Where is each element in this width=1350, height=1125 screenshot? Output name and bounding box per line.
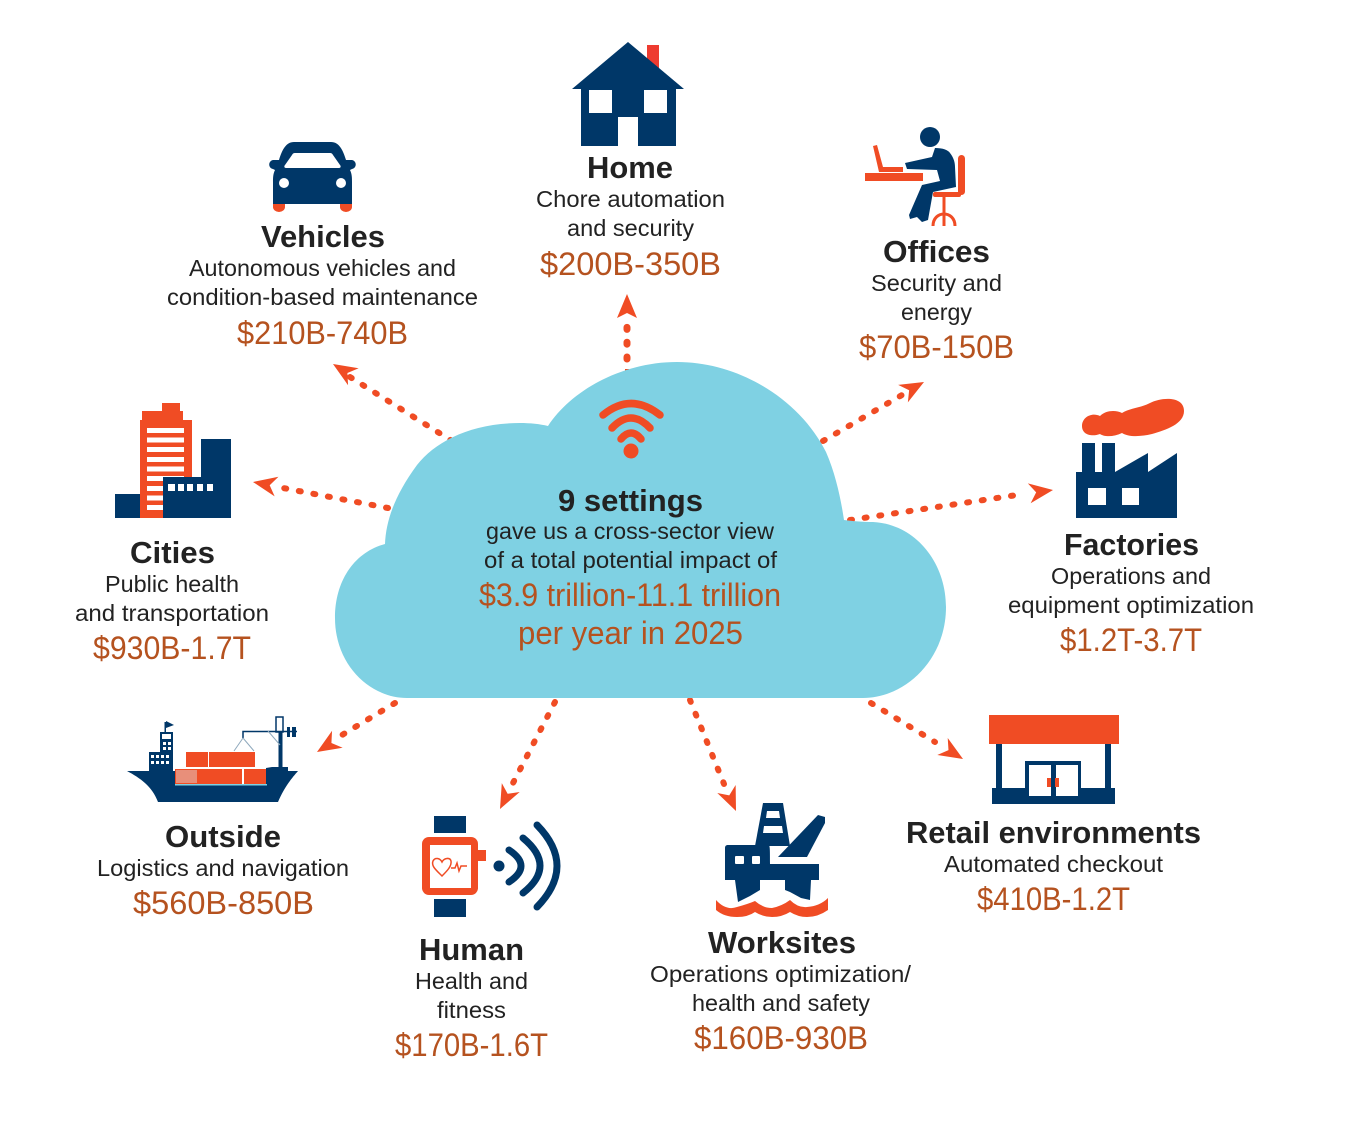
icon: house (572, 42, 684, 146)
icon: smartwatch (422, 816, 557, 917)
cloud heading: 9 settings (558, 483, 703, 518)
value: human: $170B-1.6T (395, 1027, 548, 1063)
description: cities: Public health (105, 571, 239, 597)
panel: vehicles (167, 142, 478, 351)
description: vehicles (167, 255, 478, 310)
value: home: $200B-350B (540, 246, 721, 282)
cloud text: gave us a cross-sector view (486, 518, 775, 544)
value: worksites: $160B-930B (694, 1020, 868, 1056)
description: factories: equipment optimization (1008, 592, 1254, 618)
heading: human: Human (419, 932, 524, 967)
description: human: Health and (415, 968, 528, 994)
panel: cities (75, 403, 269, 666)
panel: outside (97, 717, 349, 921)
panel: offices (859, 127, 1014, 365)
value: outside: $560B-850B (133, 885, 314, 921)
total impact figure: per year in 2025 (518, 615, 743, 651)
value: vehicles: $210B-740B (237, 315, 408, 351)
value: factories: $1.2T-3.7T (1060, 622, 1202, 658)
panel: retail environments (906, 715, 1201, 917)
description: outside: Logistics and navigation (97, 855, 349, 881)
panel: worksites (650, 803, 911, 1056)
arrow: to human (491, 702, 555, 813)
heading: retail environments: Retail environments (906, 815, 1201, 850)
description: cities: and transportation (75, 600, 269, 626)
description: retail environments: Automated checkout (944, 851, 1163, 877)
icon: person at desk (865, 127, 965, 226)
arrow: to cities (251, 472, 388, 508)
heading: factories: Factories (1064, 527, 1199, 562)
total impact figure (479, 577, 781, 651)
description: worksites (650, 961, 911, 1016)
icon: wifi (603, 404, 660, 458)
icon: oil rig (716, 803, 828, 917)
description: factories: Operations and (1051, 563, 1211, 589)
arrow: to vehicles (328, 356, 452, 441)
arrow: to offices (823, 373, 929, 441)
heading: offices: Offices (883, 234, 990, 269)
description: factories (1008, 563, 1254, 618)
description: worksites: health and safety (692, 990, 870, 1016)
icon: car (269, 142, 356, 212)
icon: storefront (989, 715, 1119, 804)
arrow: to outside (312, 703, 395, 760)
description: vehicles: Autonomous vehicles and (189, 255, 456, 281)
description: offices: Security and (871, 270, 1002, 296)
arrow: to home (617, 294, 637, 371)
heading: outside: Outside (165, 819, 281, 854)
panel: home (536, 42, 725, 282)
description: home: Chore automation (536, 186, 725, 212)
heading: vehicles: Vehicles (261, 219, 385, 254)
arrow: to retail (871, 703, 968, 768)
description: worksites: Operations optimization/ (650, 961, 911, 987)
description: home: and security (567, 215, 694, 241)
icon: factory (1076, 399, 1184, 518)
icon: cargo ship (127, 717, 298, 802)
description: human: fitness (437, 997, 506, 1023)
description: offices: energy (901, 299, 972, 325)
heading: worksites: Worksites (708, 925, 856, 960)
heading: home: Home (587, 150, 673, 185)
heading: cities: Cities (130, 535, 215, 570)
value: cities: $930B-1.7T (93, 630, 251, 666)
description: offices (871, 270, 1002, 325)
arrow: to worksites (690, 700, 745, 815)
cloud text (484, 518, 777, 573)
value: offices: $70B-150B (859, 329, 1014, 365)
panel: human (395, 816, 557, 1063)
description: vehicles: condition-based maintenance (167, 284, 478, 310)
panel: factories (1008, 399, 1254, 658)
total impact figure: $3.9 trillion-11.1 trillion (479, 577, 781, 613)
arrow: to factories (850, 480, 1054, 520)
description: cities (75, 571, 269, 626)
icon: buildings (115, 403, 231, 518)
value: retail environments: $410B-1.2T (977, 881, 1130, 917)
description: human (415, 968, 528, 1023)
cloud: central summary (335, 362, 946, 698)
description: home (536, 186, 725, 241)
cloud text: of a total potential impact of (484, 547, 777, 573)
